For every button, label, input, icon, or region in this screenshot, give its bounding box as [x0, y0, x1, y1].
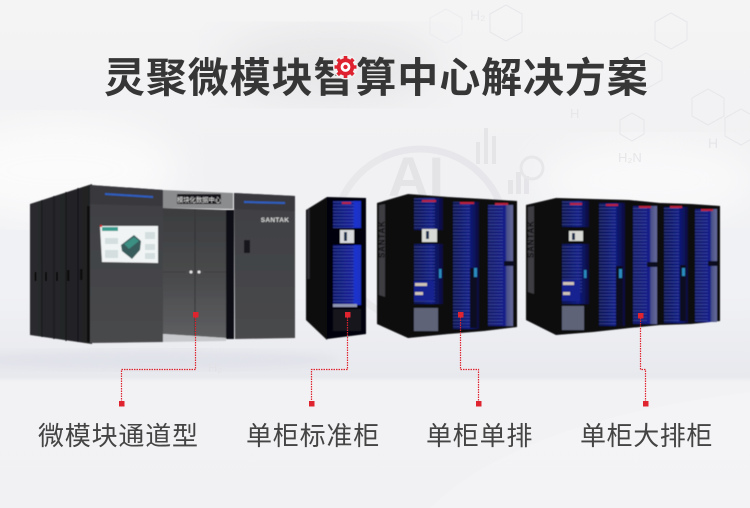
- product: single large row: [526, 198, 720, 335]
- label: micro-module channel type: 微模块通道型: [38, 421, 199, 451]
- callout connector: micro-module channel: [119, 312, 198, 406]
- callout connector: single cabinet standard: [309, 312, 350, 406]
- hexagon and chemistry watermark: H: [708, 135, 718, 151]
- product: single row: [377, 194, 517, 338]
- module side wall: [30, 184, 92, 344]
- door sign: [177, 194, 222, 204]
- cabinet side: [306, 197, 327, 340]
- module right panel: SANTAK: [261, 217, 289, 224]
- AI watermark: [334, 128, 543, 321]
- product: single cabinet standard: [306, 197, 366, 340]
- hexagon and chemistry watermark: H₂: [208, 360, 222, 375]
- door sign: 模块化数据中心: [177, 195, 222, 204]
- icon: red gear on title: [333, 54, 358, 80]
- hexagon and chemistry watermark: [208, 5, 750, 375]
- callout connector: single large row: [638, 313, 648, 406]
- cabinet front door: [327, 197, 366, 339]
- large row cabinet 1: [556, 198, 593, 335]
- large row cabinet 2: [593, 199, 629, 332]
- AI watermark: AI: [388, 145, 444, 208]
- callout connector: single row: [458, 312, 482, 406]
- touch screen: [100, 225, 158, 263]
- hexagon and chemistry watermark: H₂: [470, 7, 486, 23]
- large row side with SANTAK: [526, 198, 556, 335]
- large row cabinet 5: [691, 204, 720, 324]
- large row cabinet 3: [629, 200, 660, 328]
- module right panel: [234, 193, 295, 339]
- product: micro-module channel type: [30, 184, 295, 344]
- label: single cabinet standard: 单柜标准柜: [246, 421, 380, 451]
- module front left panel with screen: [90, 185, 163, 343]
- module central sign and doors: [163, 190, 234, 342]
- row side with SANTAK: SANTAK: [378, 220, 386, 258]
- row side with SANTAK: [377, 194, 408, 338]
- hexagon and chemistry watermark: H₂N: [618, 150, 642, 165]
- large row cabinet 4: [660, 203, 691, 325]
- row cabinet 3: [484, 199, 517, 331]
- label: single large row: 单柜大排柜: [580, 421, 713, 451]
- row cabinet 2: [448, 197, 484, 334]
- row cabinet 1: [408, 194, 448, 338]
- large row side with SANTAK: SANTAK: [526, 220, 536, 258]
- hexagon and chemistry watermark: H: [570, 106, 579, 121]
- label: single row: 单柜单排: [426, 421, 533, 451]
- title: 灵聚微模块智算中心解决方案: [104, 55, 649, 101]
